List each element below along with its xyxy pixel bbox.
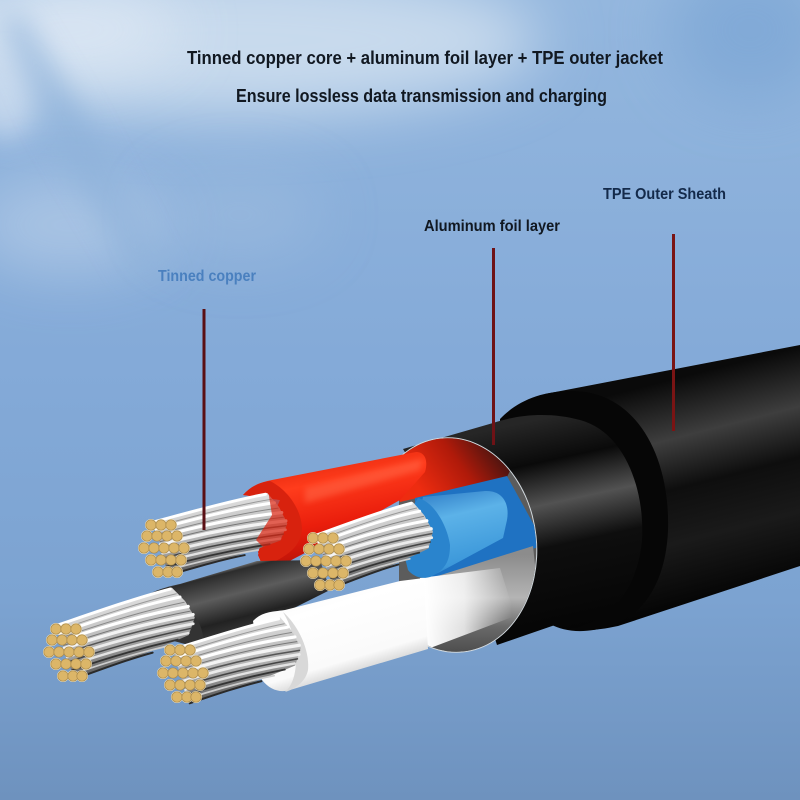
strands: black wire core [53, 584, 202, 681]
copper core: white wire [158, 645, 208, 702]
label: TPE outer sheath: TPE Outer Sheath [603, 186, 726, 203]
label: TPE outer sheath [603, 186, 726, 431]
title: Tinned copper core + aluminum foil layer + TPE outer jacket [187, 48, 663, 68]
strands: red wire core [152, 491, 293, 577]
cable illustration [44, 345, 800, 705]
crimp tint over red strand ends [256, 490, 298, 556]
strands: blue wire core [314, 499, 440, 590]
copper core: blue wire [301, 533, 351, 590]
label: aluminum foil layer [424, 218, 560, 445]
label: tinned copper: Tinned copper [158, 268, 256, 285]
copper core: red wire [139, 520, 189, 577]
label: aluminum foil layer: Aluminum foil layer [424, 218, 560, 235]
foil opening [399, 437, 538, 653]
white wire [253, 578, 428, 691]
red wire [243, 452, 426, 567]
copper core: black wire [44, 624, 94, 681]
strands: white wire core [171, 615, 307, 705]
blue wire [408, 491, 508, 576]
label: tinned copper [158, 268, 256, 530]
jacket end ring [500, 391, 668, 631]
outer jacket [500, 345, 800, 630]
black wire [148, 560, 330, 645]
aluminum foil layer section [403, 415, 642, 645]
title [187, 48, 663, 106]
title: Ensure lossless data transmission and charging [236, 86, 607, 106]
